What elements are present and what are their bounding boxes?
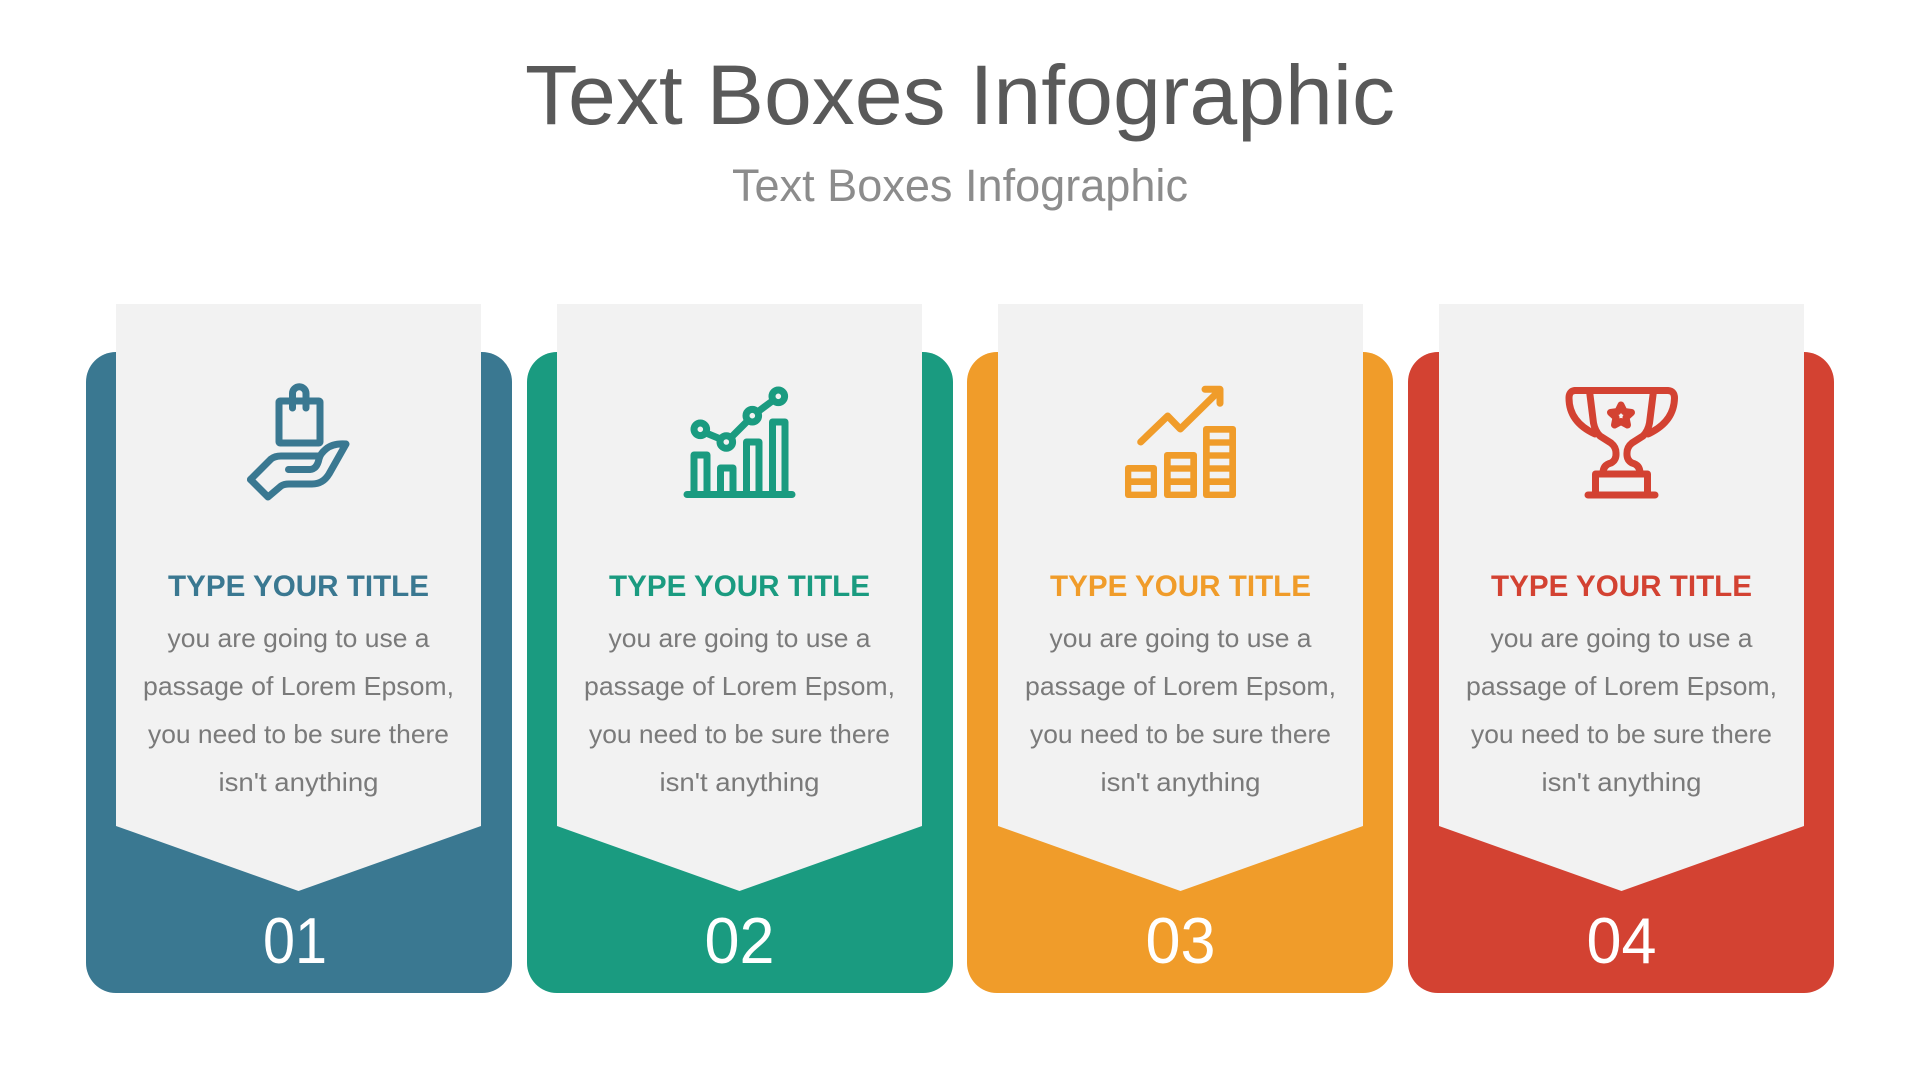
card 02 background — [527, 352, 953, 993]
card 01 heading: TYPE YOUR TITLE — [168, 570, 429, 603]
card 03 body text: you are going to use a — [1050, 623, 1312, 653]
card 01 body text: passage of Lorem Epsom, — [143, 671, 454, 701]
card 02 body text: passage of Lorem Epsom, — [584, 671, 895, 701]
card 01 body text — [143, 623, 454, 797]
card 02 body text: you need to be sure there — [589, 719, 890, 749]
panel: card 04 — [1408, 304, 1834, 993]
card 01 body text: you are going to use a — [168, 623, 430, 653]
card 03 body text: isn't anything — [1100, 767, 1260, 797]
card 04 body text: you are going to use a — [1490, 623, 1753, 653]
card 04 background — [1408, 352, 1834, 993]
panel: card 01 — [86, 304, 512, 993]
card 02 body text: isn't anything — [660, 767, 820, 797]
card 01 body text: isn't anything — [218, 767, 378, 797]
panel: card 03 — [967, 304, 1393, 993]
card 01 number: 01 — [263, 904, 327, 977]
card 04 heading: TYPE YOUR TITLE — [1491, 570, 1752, 603]
card 03 body text — [1025, 623, 1336, 797]
icon: bar chart with trend line — [687, 390, 792, 494]
card 04 inner pennant — [1439, 304, 1804, 891]
card 02 inner pennant — [557, 304, 922, 891]
panel: card 02 — [527, 304, 953, 993]
icon: trophy with star — [1569, 390, 1674, 495]
card 04 body text: isn't anything — [1542, 767, 1702, 797]
card 04 body text: passage of Lorem Epsom, — [1466, 671, 1777, 701]
card 04 body text — [1466, 623, 1777, 797]
card 01 background — [86, 352, 512, 993]
card 03 number: 03 — [1146, 904, 1216, 977]
card 04 number: 04 — [1586, 904, 1656, 977]
card 03 heading: TYPE YOUR TITLE — [1050, 570, 1311, 603]
title: Text Boxes Infographic — [525, 48, 1395, 142]
card 02 body text: you are going to use a — [608, 623, 871, 653]
card 03 background — [967, 352, 1393, 993]
card 02 number: 02 — [704, 904, 774, 977]
card 03 body text: passage of Lorem Epsom, — [1025, 671, 1336, 701]
card 02 heading: TYPE YOUR TITLE — [609, 570, 870, 603]
card 02 body text — [584, 623, 895, 797]
card 03 body text: you need to be sure there — [1030, 719, 1331, 749]
card 03 inner pennant — [998, 304, 1363, 891]
card 01 inner pennant — [116, 304, 481, 891]
subtitle: Text Boxes Infographic — [732, 160, 1188, 211]
card 04 body text: you need to be sure there — [1471, 719, 1772, 749]
icon: hand holding shopping bag — [250, 387, 346, 497]
icon: rising arrow over coin stacks — [1125, 389, 1236, 498]
card 01 body text: you need to be sure there — [148, 719, 449, 749]
